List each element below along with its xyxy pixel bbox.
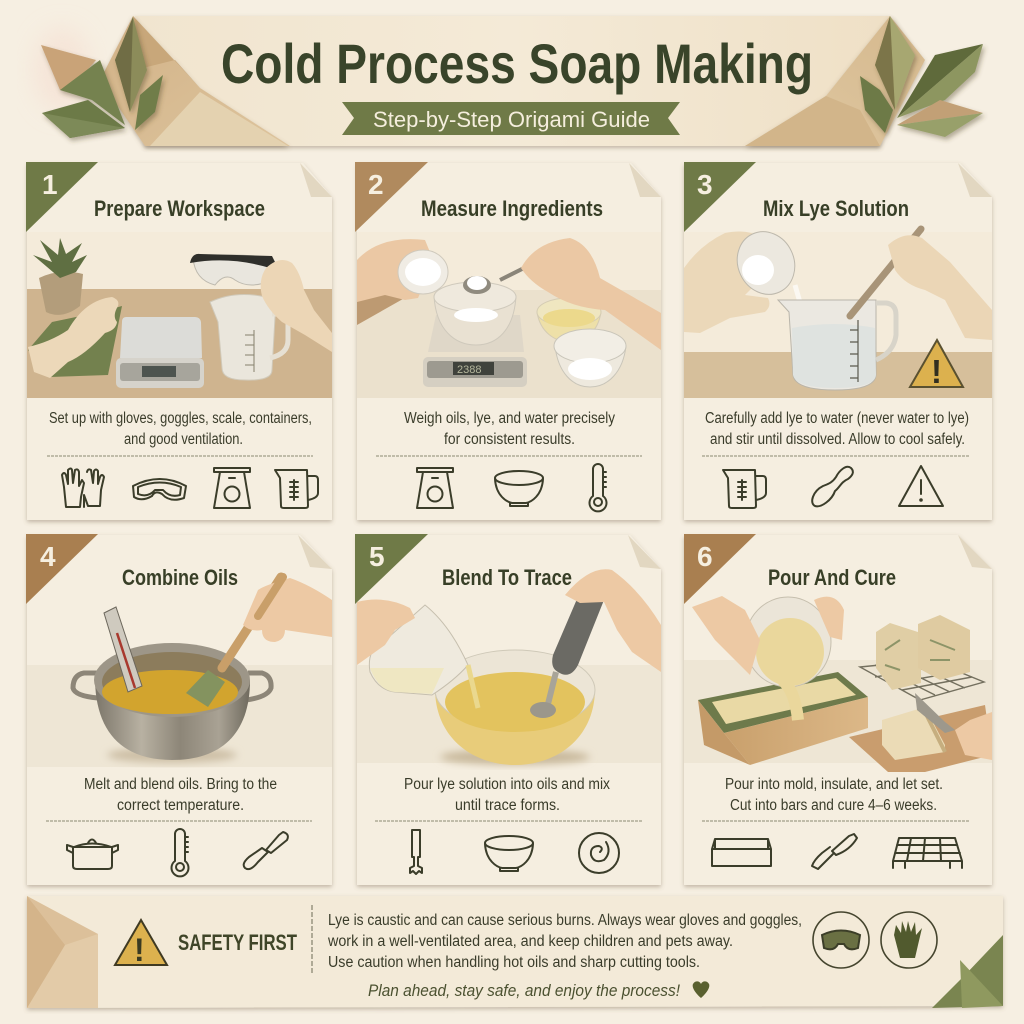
folded cloth xyxy=(28,306,122,377)
number tab xyxy=(26,534,98,604)
pouring jug and stream xyxy=(369,605,478,708)
left origami fold xyxy=(100,16,290,146)
number tab xyxy=(684,534,756,604)
safety text xyxy=(327,912,802,971)
corner fold xyxy=(298,535,332,569)
scene: weighing xyxy=(357,232,661,398)
right gloved hand xyxy=(261,260,332,352)
icon: bowl xyxy=(485,836,533,871)
corner fold xyxy=(958,535,992,569)
description xyxy=(725,776,943,814)
safety heading: SAFETY FIRST xyxy=(178,930,297,955)
scene: pouring and curing xyxy=(684,596,992,772)
plant xyxy=(33,238,87,315)
subtitle ribbon xyxy=(342,102,680,135)
icon: knife xyxy=(812,834,857,869)
stirring stick xyxy=(850,229,921,316)
warning icon: ! xyxy=(134,932,145,968)
description: Set up with gloves, goggles, scale, containers, xyxy=(49,410,312,427)
corner fold xyxy=(958,163,992,197)
left origami fold xyxy=(27,896,98,1008)
subtitle ribbon: Step-by-Step Origami Guide xyxy=(373,107,650,132)
number tab xyxy=(684,162,756,232)
description xyxy=(49,410,312,448)
description: until trace forms. xyxy=(455,797,560,814)
warning sign: ! xyxy=(931,353,942,390)
heading: Measure Ingredients xyxy=(421,196,603,221)
description: Pour into mold, insulate, and let set. xyxy=(725,776,943,793)
number tab: 3 xyxy=(697,169,713,200)
batter bowl xyxy=(745,597,831,720)
warning icon xyxy=(115,920,167,968)
scene: workspace xyxy=(27,232,332,398)
glass jug xyxy=(778,300,896,390)
safety text: Use caution when handling hot oils and sharp cutting tools. xyxy=(328,954,700,971)
bowl with lye xyxy=(434,282,516,345)
panel: step 4 combine oils xyxy=(26,534,332,885)
icon: scale xyxy=(417,468,453,508)
right hand xyxy=(521,238,661,350)
lye stream xyxy=(795,285,815,345)
description: Melt and blend oils. Bring to the xyxy=(84,776,277,793)
left hand xyxy=(357,600,415,665)
pot xyxy=(94,643,250,763)
number tab xyxy=(355,162,428,232)
number tab: 5 xyxy=(369,541,385,572)
cutting board xyxy=(849,705,992,772)
description: Weigh oils, lye, and water precisely xyxy=(404,410,615,427)
icon row xyxy=(410,830,619,874)
left origami leaves xyxy=(41,17,163,138)
number tab xyxy=(355,534,428,604)
icon: mold xyxy=(712,839,771,866)
heading: Pour And Cure xyxy=(768,565,896,590)
icon row xyxy=(62,468,318,508)
panel: step 1 prepare workspace xyxy=(26,162,332,520)
panel: step 5 blend to trace xyxy=(355,534,661,885)
corner fold xyxy=(300,163,332,197)
safety text: work in a well-ventilated area, and keep children and pets away. xyxy=(327,933,733,950)
icon: cooling rack xyxy=(893,838,962,868)
icon: heart xyxy=(693,981,709,998)
description xyxy=(404,410,615,448)
glass bowl of oil xyxy=(435,650,595,765)
safety goggles xyxy=(190,254,276,285)
description xyxy=(404,776,610,814)
kitchen scale xyxy=(116,317,204,388)
icon: pot xyxy=(67,840,118,869)
panel: step 3 mix lye solution xyxy=(684,162,992,520)
right origami leaves xyxy=(860,16,983,137)
icon row xyxy=(417,464,606,511)
spoon xyxy=(463,250,560,294)
hand xyxy=(243,578,332,642)
yellow bowl xyxy=(537,298,601,342)
icon row xyxy=(723,466,943,508)
left hand xyxy=(692,596,760,675)
cup of lye xyxy=(727,222,805,304)
scale xyxy=(423,315,527,387)
number tab: 6 xyxy=(697,541,713,572)
spatula xyxy=(186,577,281,707)
panel: safety banner xyxy=(27,896,1003,1008)
corner fold xyxy=(629,163,661,197)
icon: gloves xyxy=(62,468,104,507)
closing line: Plan ahead, stay safe, and enjoy the process! xyxy=(368,981,680,1000)
heading: Combine Oils xyxy=(122,565,238,590)
icon: spoon xyxy=(812,467,853,506)
icon: immersion blender xyxy=(410,830,422,874)
description xyxy=(84,776,277,814)
measuring jug xyxy=(210,294,288,380)
rack xyxy=(860,660,984,700)
description xyxy=(705,410,969,448)
gloves badge xyxy=(881,912,937,968)
icon: bowl xyxy=(495,471,543,506)
pot handles xyxy=(73,673,271,700)
icon: thermometer xyxy=(590,464,606,511)
icon: spatula xyxy=(244,832,288,869)
icon row xyxy=(67,829,288,876)
icon: warning xyxy=(899,466,943,506)
heading: Blend To Trace xyxy=(442,565,572,590)
gloved hand xyxy=(28,297,118,378)
immersion blender xyxy=(530,578,608,718)
scale: 2388 xyxy=(457,364,481,376)
right hand xyxy=(565,569,661,672)
right hand xyxy=(814,597,844,640)
left hand with dish xyxy=(357,239,448,302)
right origami fold xyxy=(932,935,1003,1008)
description: for consistent results. xyxy=(444,431,575,448)
panel: step 2 measure ingredients xyxy=(355,162,661,520)
thermometer xyxy=(104,607,142,692)
icon row xyxy=(712,834,962,869)
soap bars xyxy=(876,615,970,690)
right origami fold xyxy=(745,16,925,146)
glass bowl xyxy=(554,329,626,387)
description: and stir until dissolved. Allow to cool safely. xyxy=(710,431,965,448)
scene: blending xyxy=(357,569,661,765)
heading: Mix Lye Solution xyxy=(763,196,909,221)
wooden mold xyxy=(698,672,868,765)
number tab: 1 xyxy=(42,169,58,200)
cut soap xyxy=(882,707,945,760)
right glove xyxy=(888,235,992,340)
description: and good ventilation. xyxy=(124,431,243,448)
icon: goggles xyxy=(133,479,186,500)
number tab: 4 xyxy=(40,541,56,572)
cutting hand xyxy=(955,712,992,760)
scene: mixing xyxy=(684,222,992,398)
panel: step 6 pour and cure xyxy=(684,534,992,885)
description: correct temperature. xyxy=(117,797,244,814)
icon: scale xyxy=(214,468,250,508)
heading: Prepare Workspace xyxy=(94,196,265,221)
icon: thermometer xyxy=(172,829,188,876)
knife xyxy=(915,693,955,733)
number tab xyxy=(26,162,98,232)
left glove xyxy=(684,232,770,333)
icon: jug xyxy=(275,470,318,508)
title: Cold Process Soap Making xyxy=(221,32,813,95)
goggles badge xyxy=(813,912,869,968)
scene: melting oils xyxy=(27,577,332,767)
corner fold xyxy=(628,535,661,569)
safety text: Lye is caustic and can cause serious burns. Always wear gloves and goggles, xyxy=(328,912,802,929)
warning sign xyxy=(910,340,963,390)
icon: spiral xyxy=(579,833,619,873)
description: Carefully add lye to water (never water to lye) xyxy=(705,410,969,427)
description: Cut into bars and cure 4–6 weeks. xyxy=(730,797,937,814)
number tab: 2 xyxy=(368,169,384,200)
description: Pour lye solution into oils and mix xyxy=(404,776,610,793)
title banner xyxy=(41,16,983,146)
icon: jug xyxy=(723,470,766,508)
